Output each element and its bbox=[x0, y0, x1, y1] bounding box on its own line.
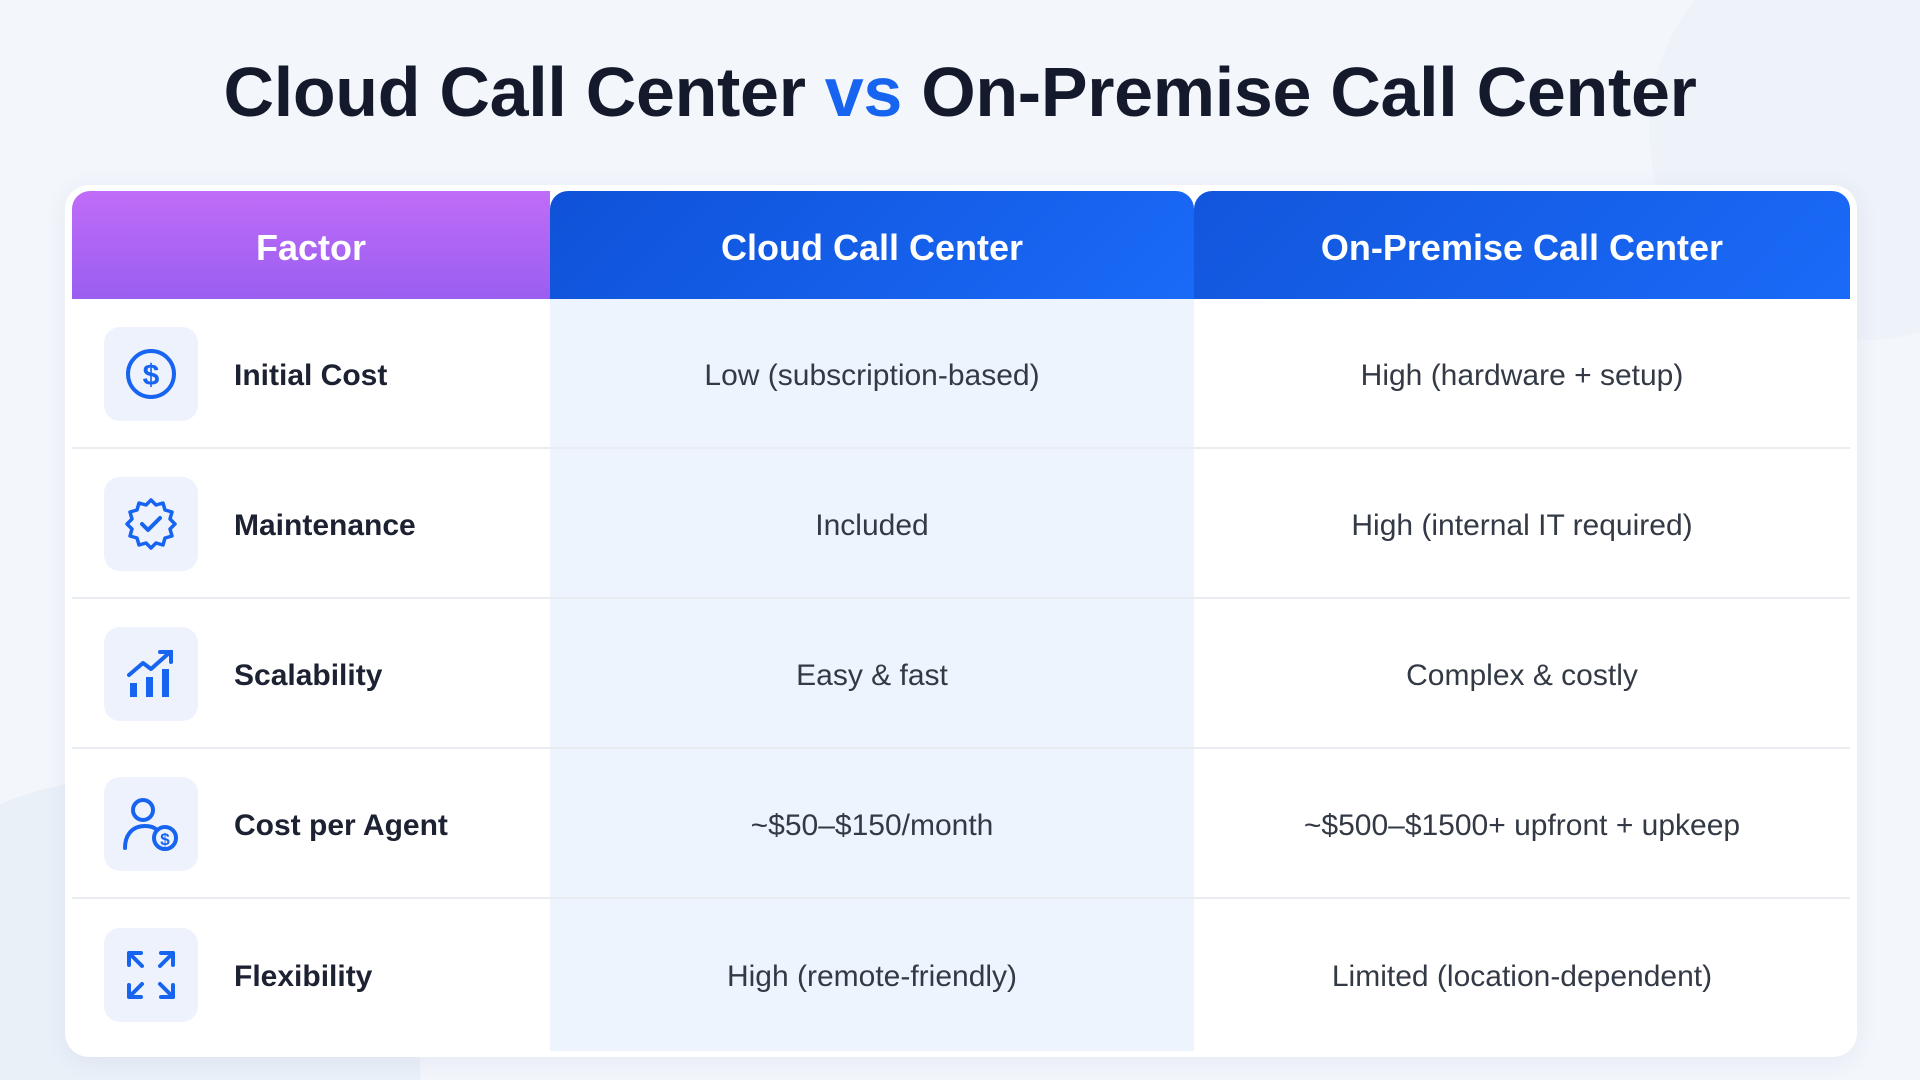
icon: gear check bbox=[104, 477, 198, 571]
header: cloud: Cloud Call Center bbox=[721, 227, 1023, 268]
row: maintenance bbox=[72, 449, 1850, 599]
header: factor bbox=[72, 191, 550, 299]
row: scalability: Easy & fast bbox=[796, 659, 948, 692]
row: scalability bbox=[72, 599, 1850, 749]
panel: comparison table bbox=[65, 185, 1857, 1057]
icon: agent with dollar bbox=[104, 777, 198, 871]
title: Cloud Call Center vs On-Premise Call Center bbox=[223, 53, 1697, 131]
row: maintenance: Included bbox=[815, 509, 929, 542]
row: initial cost bbox=[72, 299, 1850, 449]
row: scalability: Complex & costly bbox=[1406, 659, 1638, 692]
row: flexibility bbox=[104, 928, 1712, 1022]
row: flexibility: Limited (location-dependent) bbox=[1332, 960, 1712, 993]
row: cost per agent: ~$50–$150/month bbox=[751, 809, 993, 842]
icon: dollar bbox=[104, 327, 198, 421]
row: maintenance: Maintenance bbox=[234, 509, 416, 542]
row: initial cost: Low (subscription-based) bbox=[704, 359, 1040, 392]
header: on-premise bbox=[1194, 191, 1850, 299]
header: on-premise: On-Premise Call Center bbox=[1321, 227, 1723, 268]
row: cost per agent: Cost per Agent bbox=[234, 809, 448, 842]
header: factor: Factor bbox=[256, 227, 366, 268]
icon: growth chart bbox=[104, 627, 198, 721]
row: flexibility: Flexibility bbox=[234, 960, 372, 993]
row: cost per agent: ~$500–$1500+ upfront + upkeep bbox=[1304, 809, 1740, 842]
row: initial cost: High (hardware + setup) bbox=[1361, 359, 1683, 392]
icon: dollar: $ bbox=[143, 359, 160, 392]
row: maintenance: High (internal IT required) bbox=[1351, 509, 1693, 542]
row: scalability: Scalability bbox=[234, 659, 382, 692]
row: initial cost: Initial Cost bbox=[234, 359, 387, 392]
header: cloud bbox=[550, 191, 1194, 299]
row: flexibility: High (remote-friendly) bbox=[727, 960, 1017, 993]
icon: expand arrows bbox=[104, 928, 198, 1022]
icon: agent with dollar: $ bbox=[160, 830, 170, 849]
row: cost per agent bbox=[72, 749, 1850, 899]
